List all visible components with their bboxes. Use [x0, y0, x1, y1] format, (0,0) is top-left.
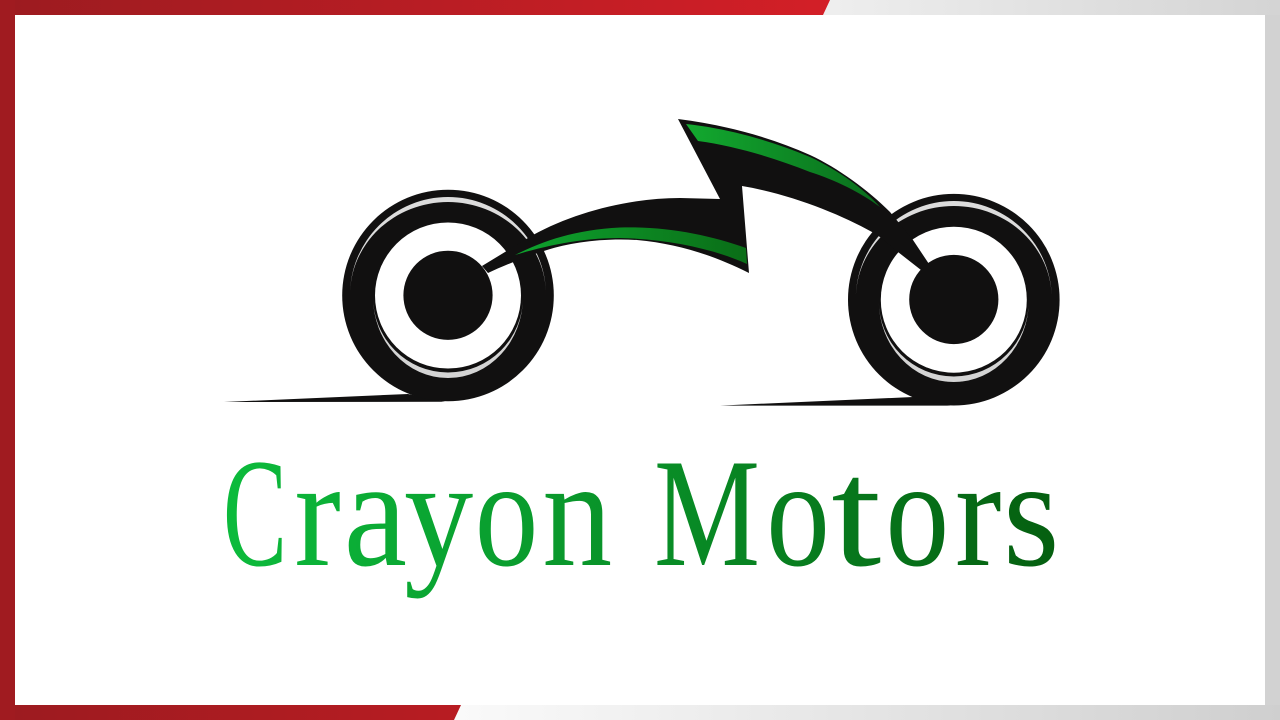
frame: bottom red bar: [0, 705, 461, 720]
green stripe: upper body: [686, 124, 880, 207]
frame: top grey bar: [820, 0, 1280, 15]
brand name: y: [404, 427, 473, 599]
brand name: r: [294, 427, 341, 599]
frame: top red bar: [0, 0, 830, 15]
brand name: o: [766, 427, 830, 599]
ground streak: left: [224, 394, 445, 402]
frame: right grey border: [1265, 0, 1280, 720]
brand name: C: [223, 427, 287, 599]
brand name: n: [542, 427, 612, 599]
brand name: a: [344, 427, 407, 599]
right wheel: [848, 194, 1060, 406]
brand name: o: [475, 427, 538, 599]
frame: left red bar: [0, 0, 15, 720]
logo: motorcycle mark: [224, 119, 1060, 406]
brand name: M: [654, 427, 760, 599]
left wheel: [342, 190, 554, 401]
green stripe: lower body: [515, 227, 747, 264]
bike body lightning shape: [482, 119, 929, 273]
brand name: r: [955, 427, 1002, 599]
frame: bottom grey bar: [450, 705, 1280, 720]
brand name: s: [1003, 427, 1060, 599]
ground streak: right: [720, 397, 950, 406]
brand name: o: [886, 427, 949, 599]
brand name: t: [831, 427, 881, 599]
